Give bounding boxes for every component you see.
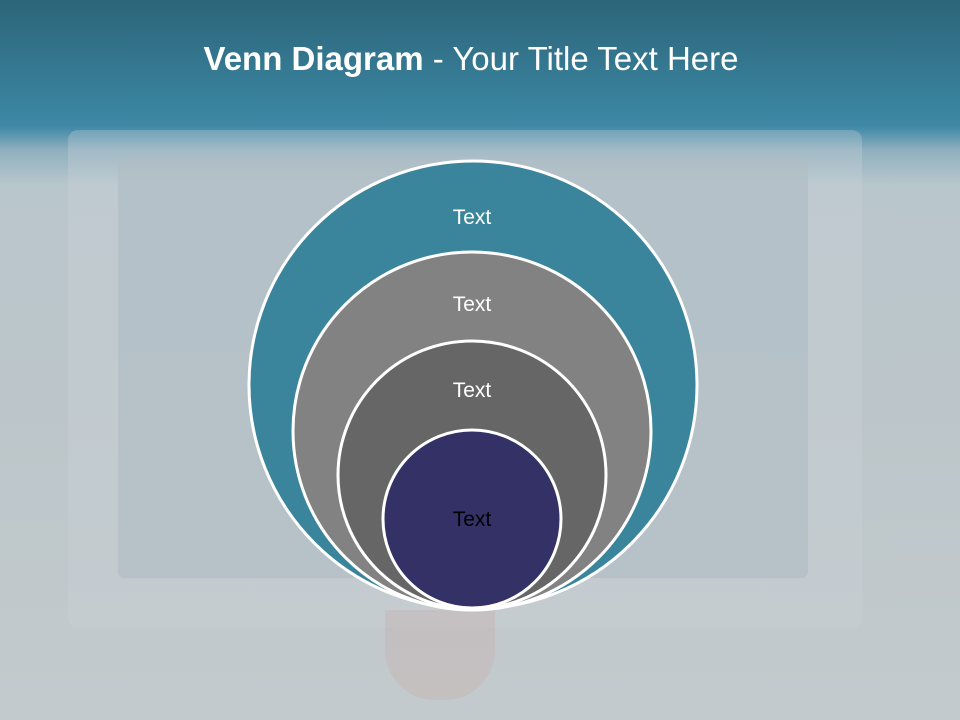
background hand bbox=[385, 610, 495, 700]
background screen bbox=[118, 158, 808, 578]
circle 1 outer: Text bbox=[453, 206, 491, 229]
background tablet bbox=[68, 130, 862, 628]
circle 2 bbox=[293, 252, 651, 610]
circle 4 inner bbox=[383, 430, 561, 608]
circle 3: Text bbox=[453, 379, 491, 402]
title: Venn Diagram - Your Title Text Here bbox=[204, 40, 738, 77]
circle 1 outer bbox=[249, 161, 697, 609]
circle 4 inner: Text bbox=[453, 508, 491, 531]
circle 2: Text bbox=[453, 293, 491, 316]
circle 3 bbox=[338, 341, 606, 609]
